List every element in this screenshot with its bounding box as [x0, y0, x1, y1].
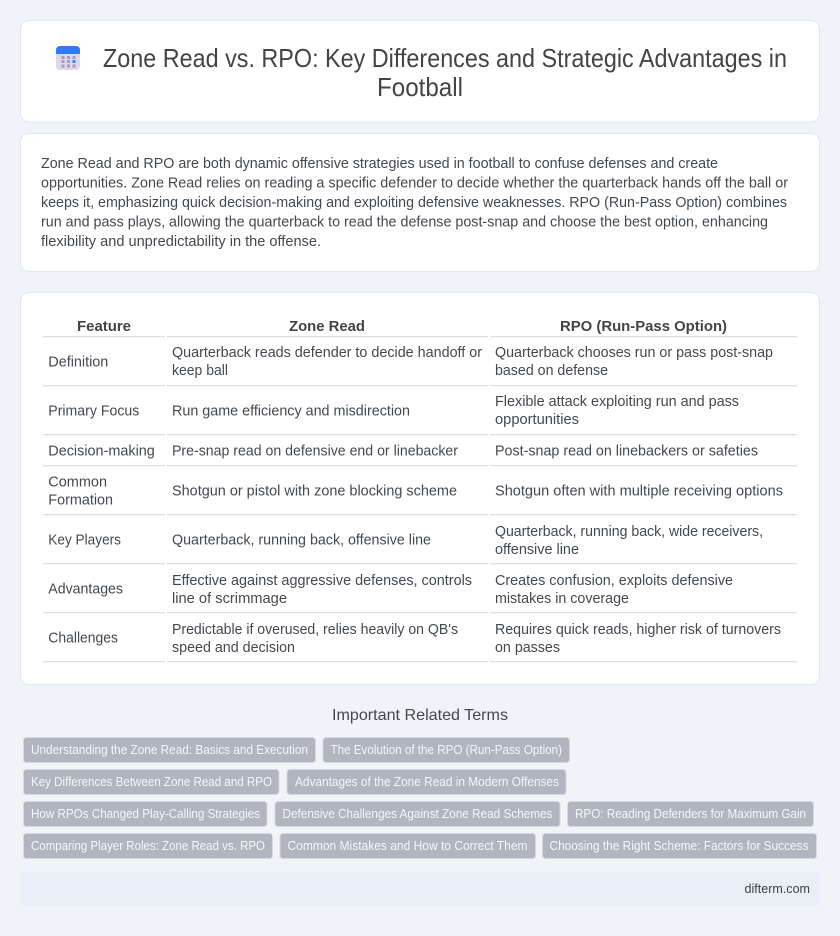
heading: Zone Read vs. RPO: Key Differences and Strategic Advantages in: [103, 45, 787, 73]
row: definition: Quarterback reads defender to decide handoff or: [172, 345, 482, 361]
row: challenges: Predictable if overused, relies heavily on QB's: [172, 622, 458, 638]
row: key players: Quarterback, running back, wide receivers,: [495, 524, 763, 540]
row: common formation: Shotgun often with multiple receiving options: [495, 484, 783, 500]
row: key players: Key Players: [48, 533, 121, 549]
related term tags: Common Mistakes and How to Correct Them: [288, 839, 528, 853]
row: definition: keep ball: [172, 363, 228, 379]
row: key players: offensive line: [495, 542, 579, 558]
related term tags: How RPOs Changed Play-Calling Strategies: [31, 807, 260, 821]
related term tags: Key Differences Between Zone Read and RPO: [31, 775, 272, 789]
text block: introduction: keeps it, emphasizing quick decision-making and exploiting defensive weaknesses. RPO (Run-Pass Option) combines: [41, 195, 787, 211]
heading: Football: [377, 74, 463, 102]
text block: introduction: flexibility and unpredictability in the offense.: [41, 234, 321, 250]
row: definition: Quarterback chooses run or pass post-snap: [495, 345, 773, 361]
panel: comparison table: [20, 292, 820, 684]
related term tags: Defensive Challenges Against Zone Read Schemes: [282, 807, 552, 821]
row: definition: based on defense: [495, 363, 608, 379]
row: challenges: on passes: [495, 640, 560, 656]
heading: important related terms: Important Related Terms: [332, 707, 508, 724]
row: definition: Definition: [48, 355, 108, 371]
row: challenges: speed and decision: [172, 640, 295, 656]
related term tags: Advantages of the Zone Read in Modern Offenses: [295, 775, 559, 789]
related term tags: The Evolution of the RPO (Run-Pass Option): [330, 743, 562, 757]
row: primary focus: Run game efficiency and misdirection: [172, 404, 410, 420]
row: decision-making: Decision-making: [48, 444, 155, 460]
table header row: RPO (Run-Pass Option): [560, 319, 727, 335]
icon: calendar: [56, 46, 80, 70]
row: advantages: Effective against aggressive defenses, controls: [172, 573, 472, 589]
related term tags: RPO: Reading Defenders for Maximum Gain: [575, 807, 806, 821]
heading: [103, 45, 787, 102]
row: common formation: Common: [48, 475, 107, 491]
row: challenges: [48, 622, 781, 656]
row: common formation: Formation: [48, 493, 113, 509]
row: key players: Quarterback, running back, offensive line: [172, 533, 431, 549]
row: definition: [48, 345, 773, 379]
row: decision-making: Post-snap read on linebackers or safeties: [495, 444, 758, 460]
table header row: [77, 319, 727, 335]
row: challenges: Challenges: [48, 631, 118, 647]
row: advantages: mistakes in coverage: [495, 591, 629, 607]
row: decision-making: [48, 444, 758, 460]
row: advantages: Creates confusion, exploits defensive: [495, 573, 733, 589]
related term tags: Choosing the Right Scheme: Factors for Success: [550, 839, 808, 853]
row: key players: [48, 524, 763, 558]
row: advantages: line of scrimmage: [172, 591, 287, 607]
related term tags: [24, 738, 816, 858]
related term tags: Comparing Player Roles: Zone Read vs. RPO: [31, 839, 265, 853]
text block: introduction: Zone Read and RPO are both dynamic offensive strategies used in football to confuse defenses and create: [41, 156, 718, 172]
row: decision-making: Pre-snap read on defensive end or linebacker: [172, 444, 458, 460]
row: common formation: [48, 475, 783, 509]
table header row: Zone Read: [289, 319, 365, 335]
row: primary focus: [48, 394, 739, 428]
row: common formation: Shotgun or pistol with zone blocking scheme: [172, 484, 457, 500]
table header row: Feature: [77, 319, 131, 335]
row: primary focus: Primary Focus: [48, 404, 139, 420]
text block: introduction: run and pass plays, allowing the quarterback to read the defense post-snap and choose the best option, enhancing: [41, 214, 768, 230]
row: advantages: Advantages: [48, 582, 123, 598]
row: primary focus: Flexible attack exploiting run and pass: [495, 394, 739, 410]
panel: introduction: [20, 134, 820, 272]
related term tags: Understanding the Zone Read: Basics and Execution: [31, 743, 308, 757]
text block: introduction: [41, 156, 788, 250]
row: challenges: Requires quick reads, higher risk of turnovers: [495, 622, 781, 638]
footer: [20, 872, 820, 906]
footer: difterm.com: [744, 881, 810, 896]
text block: introduction: opportunities. Zone Read relies on reading a specific defender to decide whether the quarterback hands off the ball or: [41, 176, 788, 192]
panel: title: [20, 20, 820, 122]
row: advantages: [48, 573, 733, 607]
row: primary focus: opportunities: [495, 412, 579, 428]
